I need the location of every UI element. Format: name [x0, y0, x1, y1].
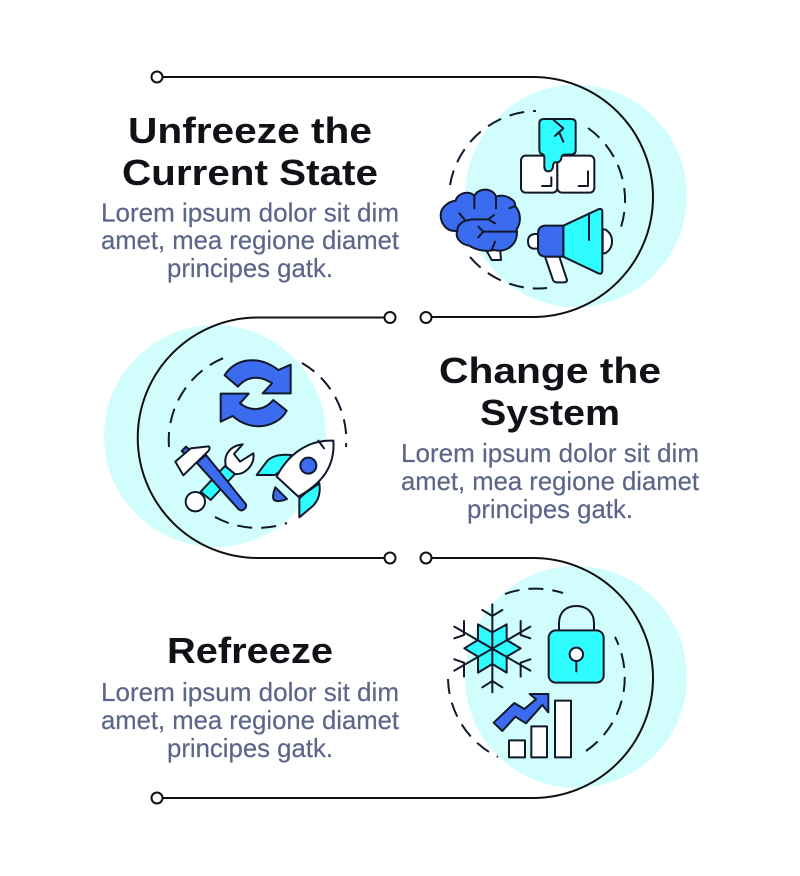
text block: step 3 description: amet, mea regione diamet [101, 705, 400, 735]
icon: brain [441, 190, 520, 260]
connector line: step 1 [152, 72, 653, 323]
text block: step 3 description: principes gatk. [167, 733, 333, 763]
text block: step 3 description [101, 677, 400, 763]
icon: snowflake [454, 604, 530, 692]
pale circle: step 1 background [465, 85, 687, 307]
connector line: step 2 [138, 312, 396, 564]
connector line: step 3 [152, 552, 653, 804]
text block: step 2 description: Lorem ipsum dolor sit dim [401, 438, 699, 468]
icon: megaphone [528, 209, 612, 282]
text block: step 2 description [401, 438, 700, 524]
text block: step 1 description: Lorem ipsum dolor sit dim [101, 198, 399, 228]
icon: melting ice cubes [521, 119, 594, 193]
text block: step 1 description [101, 198, 400, 283]
dashed ring: step 3 [448, 589, 625, 757]
text block: step 1 description: principes gatk. [167, 253, 333, 283]
icon: rising bar chart with arrow [494, 694, 571, 757]
pale circle: step 3 background [465, 566, 687, 788]
text block: step 2 description: principes gatk. [467, 494, 633, 524]
dashed ring: step 2 [169, 357, 346, 528]
heading: Change the System: System [480, 392, 620, 433]
pale circle: step 2 background [104, 325, 326, 547]
text block: step 1 description: amet, mea regione diamet [101, 225, 400, 255]
heading: Refreeze: Refreeze [167, 630, 333, 671]
icon: padlock [549, 606, 604, 683]
icon: sync arrows [221, 360, 291, 426]
dashed ring: step 1 [450, 111, 625, 288]
heading: Change the System [439, 350, 661, 433]
text block: step 2 description: amet, mea regione diamet [401, 466, 700, 496]
text block: step 3 description: Lorem ipsum dolor sit dim [101, 677, 399, 707]
heading: Unfreeze the Current State: Unfreeze the [128, 110, 372, 151]
icon: hammer and wrench [175, 444, 254, 511]
icon: rocket [257, 441, 334, 517]
heading: Unfreeze the Current State: Current State [122, 152, 378, 193]
heading: Change the System: Change the [439, 350, 661, 391]
heading: Unfreeze the Current State [122, 110, 378, 193]
